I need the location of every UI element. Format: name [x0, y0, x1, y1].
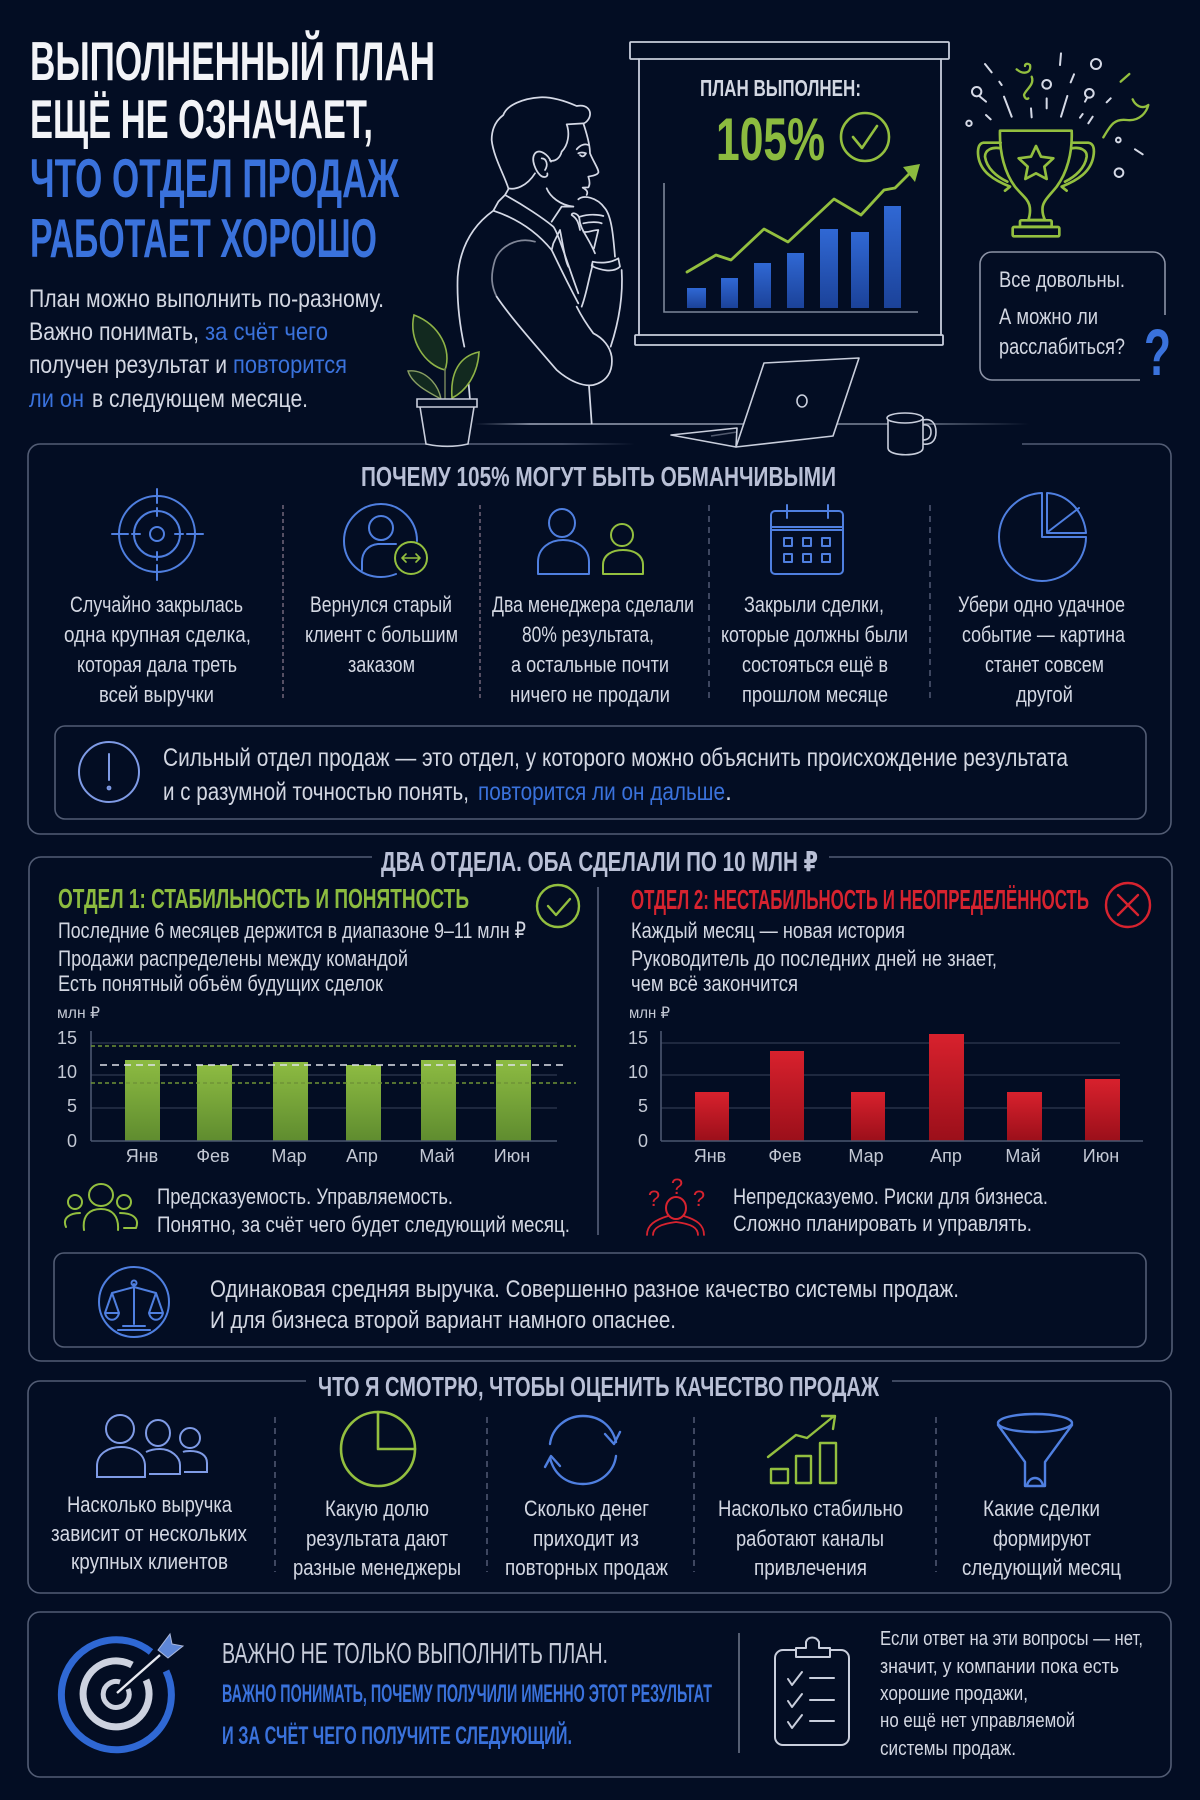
icon: plant	[408, 315, 479, 446]
text: channels: работают каналы	[736, 1526, 884, 1551]
callout: strong sales department: и с разумной точностью понять,	[163, 778, 469, 806]
title: ЕЩЁ НЕ ОЗНАЧАЕТ,	[30, 88, 373, 150]
text: old client	[305, 592, 458, 677]
intro text: Важно понимать,	[29, 318, 199, 346]
department 2 facts	[631, 918, 997, 996]
bar chart: department 2: Май	[1005, 1146, 1041, 1166]
text: closed deals: состояться ещё в	[742, 652, 888, 677]
bar chart: department 1: 5	[67, 1096, 77, 1116]
intro text	[29, 285, 384, 413]
department 2 facts: Руководитель до последних дней не знает,	[631, 946, 997, 971]
text: big deal	[64, 592, 251, 707]
department 1 facts: Последние 6 месяцев держится в диапазоне 9–11 млн ₽	[58, 918, 526, 943]
bar chart: department 2: Мар	[848, 1146, 884, 1166]
icon: target	[112, 489, 203, 580]
department 1 facts: Есть понятный объём будущих сделок	[58, 971, 383, 996]
text: big deal: которая дала треть	[77, 652, 237, 677]
icon: team	[65, 1184, 137, 1230]
title: РАБОТАЕТ ХОРОШО	[30, 207, 377, 269]
text: repeat sales: повторных продаж	[505, 1555, 668, 1580]
icon: trophy	[978, 131, 1094, 236]
text: predictability: Предсказуемость. Управляемость.	[157, 1184, 453, 1209]
text: repeat sales	[505, 1496, 668, 1580]
icon: returning client	[344, 504, 427, 577]
text: if the answer is no: но ещё нет управляемой	[880, 1710, 1075, 1732]
icon: target with arrow	[61, 1634, 183, 1750]
bar chart: department 1: 15	[57, 1028, 77, 1048]
icon: green pie	[341, 1412, 415, 1486]
text: channels	[718, 1496, 903, 1580]
text: big deal: Случайно закрылась	[70, 592, 243, 617]
illustration: trophy and confetti	[966, 53, 1148, 236]
bar chart: department 2	[628, 1005, 1143, 1166]
text: managers share: разные менеджеры	[293, 1555, 461, 1580]
icon: clipboard	[775, 1638, 849, 1745]
panel: conclusion	[28, 1612, 1171, 1777]
intro text: в следующем месяце.	[92, 385, 308, 413]
text: closed deals: прошлом месяце	[742, 682, 888, 707]
text: closed deals: Закрыли сделки,	[744, 592, 884, 617]
icon: calendar	[771, 505, 843, 574]
heading: ЧТО Я СМОТРЮ, ЧТОБЫ ОЦЕНИТЬ КАЧЕСТВО ПРОДАЖ	[318, 1371, 879, 1402]
text: deals: формируют	[993, 1526, 1091, 1551]
icon: confused person	[647, 1174, 705, 1235]
bar chart: department 2: 10	[628, 1062, 648, 1082]
icon: pie	[999, 493, 1086, 581]
icon: scales	[99, 1267, 169, 1337]
text: deals	[962, 1496, 1121, 1580]
text: old client: клиент с большим	[305, 622, 458, 647]
callout: strong sales department	[55, 726, 1146, 819]
icon: check circle	[841, 113, 889, 161]
bar chart: department 2: млн ₽	[629, 1005, 670, 1022]
bar chart: department 2: Янв	[694, 1146, 726, 1166]
text: unpredictability	[733, 1184, 1048, 1236]
bar chart: department 2: 0	[638, 1131, 648, 1151]
icon: mug	[887, 413, 936, 455]
text: old client: Вернулся старый	[310, 592, 452, 617]
text: repeat sales: приходит из	[533, 1526, 639, 1551]
department 2 facts: чем всё закончится	[631, 971, 798, 996]
bar chart: department 2: Фев	[768, 1146, 802, 1166]
icon: cross	[1106, 883, 1150, 927]
icon: funnel	[998, 1414, 1072, 1486]
illustration: presentation screen	[630, 42, 949, 345]
bar chart: department 2: 5	[638, 1096, 648, 1116]
title: ВЫПОЛНЕННЫЙ ПЛАН	[30, 29, 435, 92]
intro text: повторится	[233, 351, 347, 379]
text: big deal: одна крупная сделка,	[64, 622, 251, 647]
text: remove lucky event	[958, 592, 1126, 707]
text: big clients: крупных клиентов	[71, 1549, 228, 1574]
icon: clients	[97, 1415, 207, 1477]
text: if the answer is no: Если ответ на эти вопросы — нет,	[880, 1628, 1143, 1650]
icon: confused person: ?	[648, 1186, 660, 1211]
illustration: thinking man	[457, 97, 622, 423]
panel: two departments	[29, 846, 1172, 1361]
text: big clients: зависит от нескольких	[51, 1521, 247, 1546]
text: if the answer is no: хорошие продажи,	[880, 1683, 1028, 1705]
department 2	[628, 883, 1150, 1236]
icon: confused person: ?	[671, 1174, 683, 1199]
conclusion heading: ВАЖНО НЕ ТОЛЬКО ВЫПОЛНИТЬ ПЛАН.	[222, 1638, 608, 1670]
intro text: получен результат и	[29, 351, 227, 379]
speech bubble: Все довольны.	[999, 267, 1125, 292]
conclusion blue text	[222, 1680, 712, 1750]
text: big clients: Насколько выручка	[67, 1492, 233, 1517]
text: two managers	[492, 592, 694, 707]
icon: cycle	[545, 1416, 620, 1484]
text: predictability: Понятно, за счёт чего будет следующий месяц.	[157, 1212, 570, 1237]
bar chart: department 1: Мар	[271, 1146, 307, 1166]
department 1 facts: Продажи распределены между командой	[58, 946, 408, 971]
callout: same average revenue	[54, 1253, 1146, 1347]
text: two managers: а остальные почти	[511, 652, 669, 677]
screen frame	[630, 42, 949, 345]
speech bubble	[980, 252, 1171, 389]
text: managers share	[293, 1496, 461, 1580]
text: big clients	[51, 1492, 247, 1574]
bar chart: department 1: Апр	[346, 1146, 378, 1166]
department 1	[57, 883, 579, 1237]
bar chart: department 2: Апр	[930, 1146, 962, 1166]
question mark: ?	[1144, 315, 1171, 389]
text: two managers: Два менеджера сделали	[492, 592, 694, 617]
plan completed label: ПЛАН ВЫПОЛНЕН:	[700, 75, 861, 101]
intro text: за счёт чего	[205, 318, 328, 346]
text: channels: Насколько стабильно	[718, 1496, 903, 1521]
bar chart: department 1: Май	[419, 1146, 455, 1166]
heading: ПОЧЕМУ 105% МОГУТ БЫТЬ ОБМАНЧИВЫМИ	[361, 461, 836, 492]
text: managers share: Какую долю	[325, 1496, 429, 1521]
callout: same average revenue: И для бизнеса второй вариант намного опаснее.	[210, 1307, 676, 1334]
text: big deal: всей выручки	[99, 682, 214, 707]
intro text: План можно выполнить по-разному.	[29, 285, 384, 313]
department 1 facts	[58, 918, 526, 996]
105 percent: 105%	[716, 106, 825, 173]
department 2 facts: Каждый месяц — новая история	[631, 918, 905, 943]
text: old client: заказом	[348, 652, 415, 677]
text: if the answer is no: значит, у компании пока есть	[880, 1656, 1119, 1678]
bar chart: department 1: млн ₽	[57, 1005, 100, 1022]
callout: strong sales department: .	[725, 778, 732, 806]
text: predictability	[157, 1184, 570, 1237]
bar chart: department 1: 0	[67, 1131, 77, 1151]
growth chart	[664, 164, 920, 312]
conclusion blue text: И ЗА СЧЁТ ЧЕГО ПОЛУЧИТЕ СЛЕДУЮЩИЙ.	[222, 1720, 572, 1750]
text: remove lucky event: Убери одно удачное	[958, 592, 1125, 617]
callout: same average revenue: Одинаковая средняя выручка. Совершенно разное качество системы продаж.	[210, 1276, 959, 1303]
title: ЧТО ОТДЕЛ ПРОДАЖ	[30, 147, 399, 209]
bar chart: department 1: Июн	[494, 1146, 530, 1166]
icon: two managers	[538, 509, 643, 574]
icon: exclamation	[79, 742, 139, 802]
icon: check	[537, 885, 579, 927]
title	[30, 29, 435, 269]
conclusion blue text: ВАЖНО ПОНИМАТЬ, ПОЧЕМУ ПОЛУЧИЛИ ИМЕННО ЭТОТ РЕЗУЛЬТАТ	[222, 1680, 712, 1708]
speech bubble: А можно ли	[999, 304, 1098, 329]
bar chart: department 1: Янв	[126, 1146, 158, 1166]
bar chart: department 1: Фев	[196, 1146, 230, 1166]
text: managers share: результата дают	[306, 1526, 448, 1551]
heading: ДВА ОТДЕЛА. ОБА СДЕЛАЛИ ПО 10 МЛН ₽	[381, 846, 818, 877]
panel: what I look at	[28, 1371, 1171, 1593]
text: deals: следующий месяц	[962, 1555, 1121, 1580]
icon: channel growth	[768, 1416, 836, 1483]
bar chart: department 1: 10	[57, 1062, 77, 1082]
panel: why 105 percent can deceive	[28, 444, 1171, 834]
text: closed deals	[721, 592, 908, 707]
department 1 heading: ОТДЕЛ 1: СТАБИЛЬНОСТЬ И ПОНЯТНОСТЬ	[58, 883, 469, 914]
bar chart: department 2: 15	[628, 1028, 648, 1048]
text: if the answer is no: системы продаж.	[880, 1738, 1016, 1760]
text: two managers: ничего не продали	[510, 682, 670, 707]
text: remove lucky event: станет совсем	[985, 652, 1104, 677]
text: unpredictability: Непредсказуемо. Риски для бизнеса.	[733, 1184, 1048, 1209]
desk line	[474, 423, 1029, 425]
text: channels: привлечения	[754, 1555, 867, 1580]
icon: laptop	[671, 358, 859, 447]
text: closed deals: которые должны были	[721, 622, 908, 647]
bar chart: department 1	[57, 1005, 576, 1166]
speech bubble: расслабиться?	[999, 334, 1125, 359]
intro text: ли он	[29, 385, 84, 413]
text: two managers: 80% результата,	[522, 622, 654, 647]
text: repeat sales: Сколько денег	[524, 1496, 649, 1521]
bar chart: department 2: Июн	[1083, 1146, 1119, 1166]
text: deals: Какие сделки	[983, 1496, 1100, 1521]
text: remove lucky event: другой	[1016, 682, 1073, 707]
callout: strong sales department: повторится ли он дальше	[478, 778, 725, 806]
confetti	[966, 53, 1143, 177]
text: unpredictability: Сложно планировать и управлять.	[733, 1211, 1032, 1236]
icon: confused person: ?	[693, 1186, 705, 1211]
text: if the answer is no	[880, 1628, 1143, 1760]
text: remove lucky event: событие — картина	[962, 622, 1126, 647]
